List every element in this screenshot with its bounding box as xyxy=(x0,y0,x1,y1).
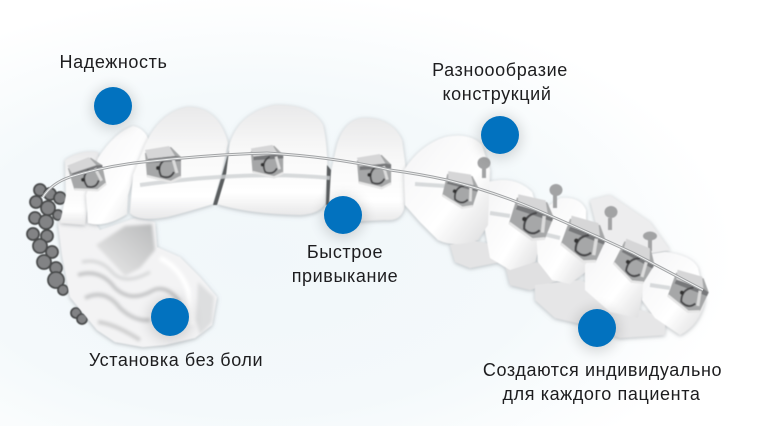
tooth: right canine xyxy=(404,136,705,338)
brackets xyxy=(67,145,714,317)
illustration: dental arch with braces xyxy=(27,105,714,347)
label: reliability: Надежность xyxy=(60,52,167,72)
palate shading and ridges xyxy=(78,224,214,340)
label: individually made: Создаются индивидуально xyxy=(483,360,722,380)
label: construction variety: конструкций xyxy=(443,84,551,104)
label: fast adaptation: Быстрое xyxy=(307,242,383,262)
gum band line xyxy=(140,175,670,288)
marker shadows xyxy=(92,87,618,351)
marker: fast adaptation xyxy=(324,196,362,234)
tooth: upper left central xyxy=(217,105,328,215)
tooth: right premolars xyxy=(485,180,540,270)
tooth gap shadows xyxy=(213,150,331,205)
label: individually made: для каждого пациента xyxy=(503,384,701,404)
tooth: left canine xyxy=(86,126,149,224)
tooth: left premolar xyxy=(60,152,100,225)
back chain on the left molars xyxy=(27,184,87,324)
label: painless installation: Установка без боли xyxy=(89,350,263,370)
marker: painless installation xyxy=(151,298,189,336)
label: construction variety: Разноообразие xyxy=(432,60,568,80)
tooth: upper right central xyxy=(327,118,406,222)
marker: individually made xyxy=(578,309,616,347)
left palate and molars xyxy=(58,205,217,347)
label: fast adaptation: привыкание xyxy=(292,266,398,286)
tooth: upper left lateral xyxy=(130,107,228,219)
marker: reliability xyxy=(94,87,132,125)
archwire xyxy=(43,153,703,290)
hooks on right brackets xyxy=(478,157,657,251)
marker: construction variety xyxy=(481,116,519,154)
